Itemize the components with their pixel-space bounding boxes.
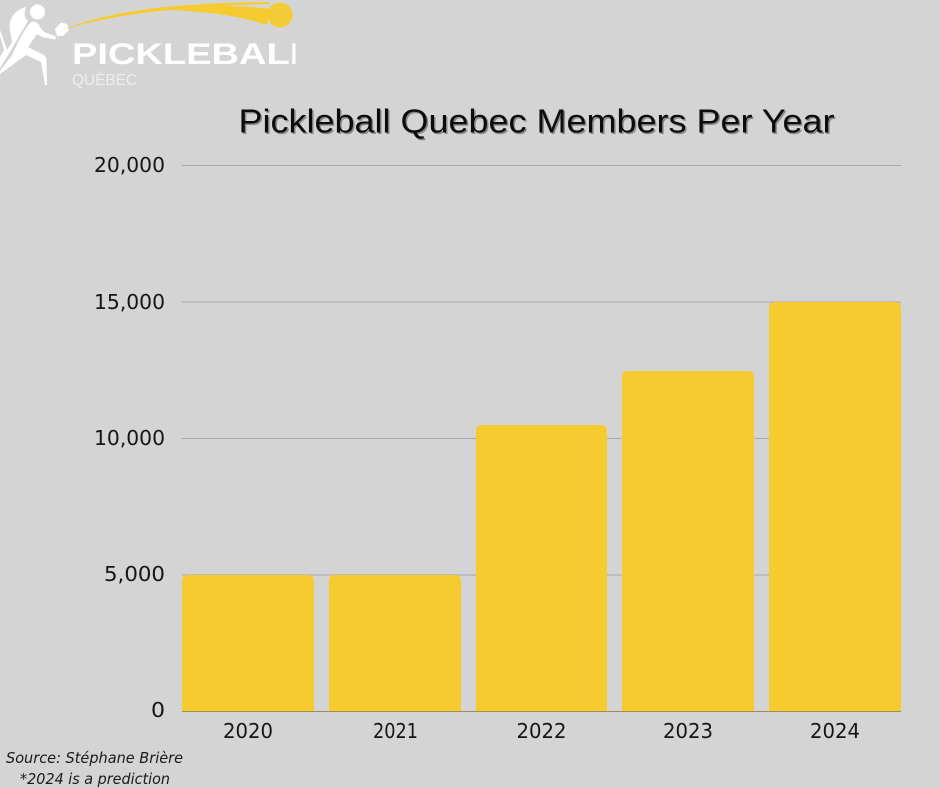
source note: *2024 is a prediction: [20, 770, 170, 788]
x axis labels: 2023: [663, 719, 713, 743]
x axis labels: 2021: [373, 719, 418, 743]
x axis labels: 2024: [810, 719, 860, 743]
y axis labels: 20,000: [94, 153, 165, 177]
x axis labels: 2022: [516, 719, 566, 743]
y axis labels: 10,000: [94, 426, 165, 450]
y axis labels: 5,000: [104, 562, 165, 586]
y axis labels: 0: [151, 698, 165, 722]
icon: pickleball: [268, 2, 292, 28]
source note: Source: Stéphane Brière: [6, 749, 183, 767]
y axis labels: [94, 153, 165, 722]
source note: [6, 749, 183, 788]
y axis labels: 15,000: [94, 290, 165, 314]
logo: Pickleball Québec: [0, 2, 313, 89]
logo wordmark: PICKLEBALL: [72, 38, 313, 71]
x axis labels: 2020: [223, 719, 273, 743]
title: Pickleball Quebec Members Per Year: [238, 102, 834, 140]
bars: [182, 302, 901, 711]
title: Pickleball Quebec Members Per Year: [240, 104, 836, 141]
icon: ball trail: [63, 2, 270, 30]
icon: pickleball player: [0, 4, 69, 85]
logo subtitle: QUÉBEC: [72, 70, 137, 89]
bar chart: members per year: [94, 153, 901, 743]
x axis labels: [223, 719, 860, 743]
